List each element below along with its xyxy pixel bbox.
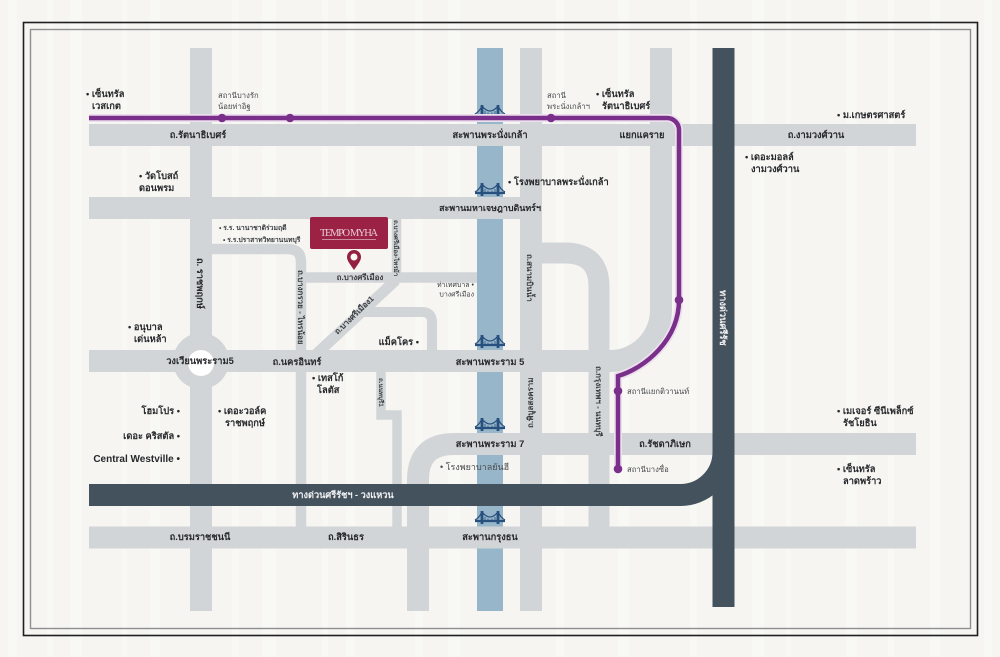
label: Tiwanon station: สถานีแยกติวานนท์ (627, 387, 689, 396)
label: The Mall Ngamwongwan: • เดอะมอลล์ (745, 152, 794, 162)
label: Prasat Witthaya school: • ร.ร.ปราสาทวิทยานนทบุรี (223, 236, 301, 244)
label: Bang Si Mueang - Sai Ma road: ถ.บางศรีเมือง-ไทรม้า (392, 220, 400, 277)
label: Pibulsongkram road: ถ.พิบูลสงคราม (526, 377, 536, 428)
label: Nonthaburi 1 road: ถ.นนทบุรี1 (377, 378, 385, 407)
label: Tesco Lotus: • เทสโก้ (312, 373, 343, 383)
logo (310, 217, 388, 249)
rail stations (218, 114, 683, 473)
label: municipality: ท่าเทศบาล • (437, 282, 474, 289)
label: Wat Bot Don Phrom: • วัดโบสถ์ (139, 171, 178, 181)
label: Makro: แม็คโคร • (379, 335, 419, 347)
label: Wat Bot Don Phrom: ดอนพรม (139, 183, 174, 193)
label: Phra Nang Klao station: สถานี (547, 91, 566, 100)
label: Phra Nang Klao station: พระนั่งเกล้าฯ (547, 101, 590, 111)
label: The Mall Ngamwongwan: งามวงศ์วาน (751, 163, 800, 174)
label: The Walk Ratchaphruek: • เดอะวอล์ค (218, 406, 266, 416)
label: Si Rat expressway vertical: ทางด่วนศรีรัช (718, 290, 729, 346)
label: Krung Thon bridge: สะพานกรุงธน (462, 532, 518, 543)
label: Central Westville: Central Westville • (93, 454, 180, 465)
label: The Walk Ratchaphruek: ราชพฤกษ์ (225, 417, 265, 428)
label: Bang Si Mueang road: ถ.บางศรีเมือง (337, 272, 383, 282)
label: municipality: บางศรีเมือง (439, 290, 474, 298)
label: Central Rattanathibet: รัตนาธิเบศร์ (602, 100, 650, 111)
label: Phra Nang Klao bridge: สะพานพระนั่งเกล้า (452, 128, 528, 140)
label: Central Westgate: เวสเกต (92, 101, 121, 111)
label: Ratchaphruek road: ถ. ราชพฤกษ์ (195, 258, 206, 309)
label: HomePro: โฮมโปร • (140, 405, 180, 416)
label: Khae Rai junction: แยกแคราย (620, 130, 664, 140)
road network (89, 48, 916, 611)
label: Major Cineplex Ratchayothin: • เมเจอร์ ซีนีเพล็กซ์ (837, 406, 914, 416)
label: Central Westgate: • เซ็นทรัล (86, 89, 124, 99)
label: Tesco Lotus: โลตัส (316, 384, 340, 395)
logo: TEMPO MYHA (320, 228, 378, 239)
label: Central Rattanathibet: • เซ็นทรัล (596, 89, 634, 99)
label: Krung Thep - Nonthaburi road: ถ.กรุงเทพฯ - นนทบุรี (593, 366, 604, 437)
purple rail line (89, 118, 679, 469)
label: Sanam Bin Nam road: ถ.สนามบินน้ำ (525, 254, 536, 302)
label: Bang Sue station: สถานีบางซื่อ (627, 464, 669, 474)
label: Major Cineplex Ratchayothin: รัชโยธิน (843, 417, 877, 428)
label: Yanhee hospital: • โรงพยาบาลยันฮี (440, 462, 509, 472)
label: Nanachat Ruamrudee school: • ร.ร. นานาชาติร่วมฤดี (219, 224, 287, 232)
label: Phra Nang Klao hospital: • โรงพยาบาลพระนั่งเกล้า (508, 175, 609, 187)
river (477, 48, 503, 611)
bridges (475, 105, 505, 524)
label: Si Rat expressway: ทางด่วนศรีรัชฯ - วงแหวน (292, 489, 394, 500)
label: Ratchadaphisek road: ถ.รัชดาภิเษก (639, 439, 691, 449)
label: Nakhon In road: ถ.นครอินทร์ (273, 356, 321, 367)
label: The Crystal: เดอะ คริสตัล • (123, 431, 180, 441)
label: Rama 5 circle: วงเวียนพระราม5 (166, 355, 234, 366)
label: Bang Rak Noi station: น้อยท่าอิฐ (218, 102, 251, 111)
location pin (347, 250, 361, 270)
expressway (89, 48, 724, 607)
label: Bang Kruai - Sai Noi road: ถ.บางกรวย - ไทรน้อย (296, 270, 306, 345)
label: Kasetsart University: • ม.เกษตรศาสตร์ (837, 109, 905, 120)
label: Central Lat Phrao: • เซ็นทรัล (837, 464, 876, 474)
label: Central Lat Phrao: ลาดพร้าว (843, 475, 882, 486)
label: Anuban Den La: เด่นหล้า (134, 333, 167, 344)
label: Bang Si Mueang 1 road: ถ.บางศรีเมือง1 (332, 293, 376, 336)
label: Bang Rak Noi station: สถานีบางรัก (218, 91, 259, 100)
label: Rama 5 bridge: สะพานพระราม 5 (456, 357, 524, 367)
label: Maha Chesadabodin bridge: สะพานมหาเจษฎาบดินทร์ฯ (439, 202, 541, 213)
label: Borommaratchachonnani road: ถ.บรมราชชนนี (170, 531, 231, 542)
label: Ngamwongwan road: ถ.งามวงศ์วาน (788, 129, 845, 140)
label: Rattanathibet road: ถ.รัตนาธิเบศร์ (170, 129, 226, 140)
label: Anuban Den La: • อนุบาล (128, 322, 163, 332)
label: Sirindhorn road: ถ.สิรินธร (328, 532, 364, 542)
label: Rama 7 bridge: สะพานพระราม 7 (456, 439, 524, 449)
